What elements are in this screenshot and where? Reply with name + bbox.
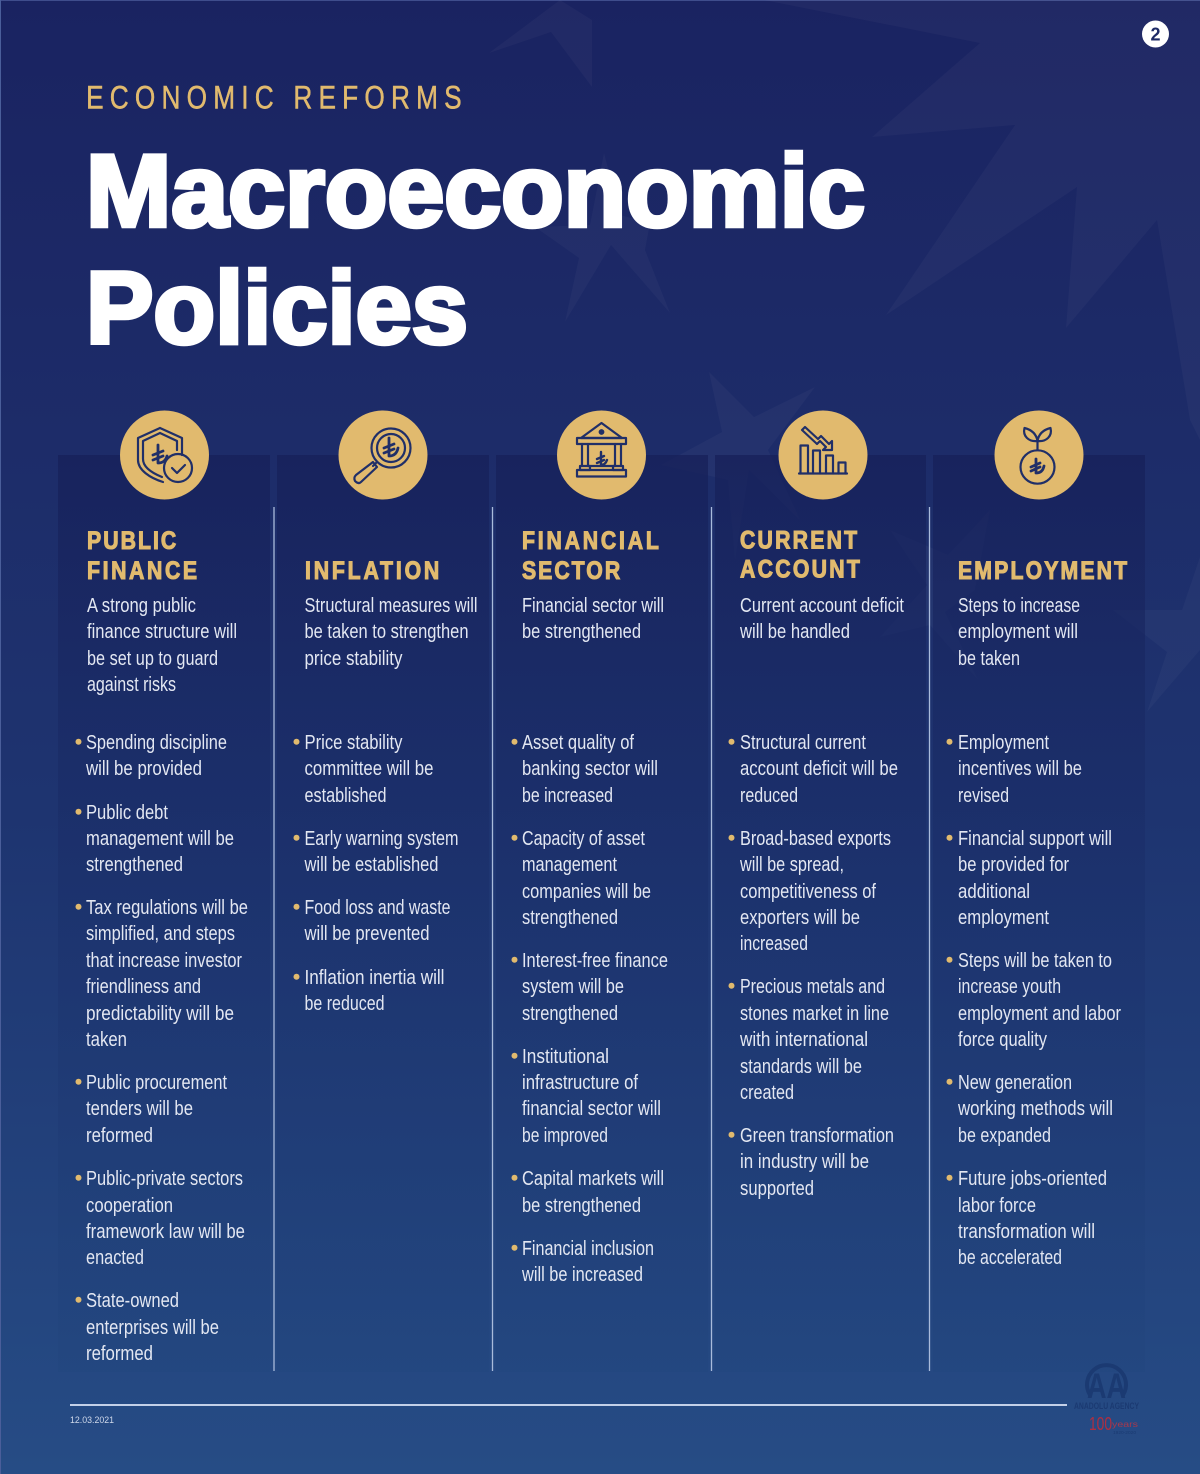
panel: employment	[933, 410, 1145, 1372]
intro text: be set up to guard	[87, 648, 218, 670]
intro text: price stability	[304, 648, 402, 670]
bullet: precious metals: stones market in line	[740, 1003, 889, 1025]
heading	[87, 526, 197, 584]
logo: Anadolu Agency: years	[1112, 1420, 1138, 1429]
bullet: new generation: New generation	[958, 1072, 1072, 1094]
bullet: new generation: working methods will	[957, 1098, 1113, 1120]
bullet: tax regulations: friendliness and	[86, 976, 201, 998]
bullet: capital markets: be strengthened	[522, 1195, 641, 1217]
bullet: youth employment: force quality	[958, 1029, 1047, 1051]
intro text: employment will	[958, 621, 1078, 643]
bullet: future jobs	[946, 1168, 1107, 1269]
footer rule	[70, 1404, 1067, 1406]
bullet: green transformation: Green transformation	[740, 1125, 894, 1147]
bullet: tax regulations: predictability will be	[86, 1003, 234, 1025]
heading: CURRENT	[740, 526, 857, 554]
bullet: green transformation	[728, 1125, 894, 1200]
intro text: be taken to strengthen	[304, 621, 468, 643]
bullet: new generation	[946, 1072, 1113, 1147]
bullet: capital markets	[512, 1168, 664, 1217]
bullet: institutional infrastructure: infrastructure of	[522, 1072, 638, 1094]
bullet: food loss: will be prevented	[304, 923, 430, 945]
bullet: asset quality: be increased	[522, 785, 613, 807]
page number badge	[1142, 20, 1169, 48]
bullet: precious metals	[728, 976, 889, 1104]
bullet: public-private: framework law will be	[86, 1221, 245, 1243]
bullet: broad-based exports: Broad-based exports	[740, 828, 891, 850]
bullet: capacity of asset management: strengthened	[522, 907, 618, 929]
bullet: public-private	[76, 1168, 245, 1269]
bullet: interest-free finance: system will be	[522, 976, 624, 998]
bullet: financial inclusion: Financial inclusion	[522, 1238, 654, 1260]
bullet: public-private: enacted	[86, 1247, 144, 1269]
bullet: spending discipline: Spending discipline	[86, 732, 227, 754]
bullet: broad-based exports: competitiveness of	[740, 881, 876, 903]
icon: falling bar chart	[778, 410, 868, 500]
bullet: structural current account deficit: reduced	[740, 785, 798, 807]
heading: FINANCE	[87, 556, 197, 584]
bullet: state-owned: reformed	[86, 1343, 153, 1365]
bullet: public-private: Public-private sectors	[86, 1168, 243, 1190]
bullet: employment incentives: revised	[958, 785, 1009, 807]
bullet: institutional infrastructure: financial sector will	[522, 1098, 661, 1120]
bullet: capacity of asset management	[512, 828, 651, 929]
bullet: youth employment: Steps will be taken to	[958, 950, 1112, 972]
heading: ACCOUNT	[740, 555, 860, 583]
logo: Anadolu Agency: ANADOLU AGENCY	[1074, 1401, 1139, 1411]
bullet: interest-free finance: Interest-free finance	[522, 950, 668, 972]
heading	[522, 526, 659, 584]
bullet: structural current account deficit: account deficit will be	[740, 758, 898, 780]
intro text: be taken	[958, 648, 1020, 670]
title: Policies	[86, 251, 468, 365]
bullet list	[294, 732, 458, 1015]
bullet list	[512, 732, 668, 1286]
bullet: broad-based exports	[728, 828, 891, 955]
bullet: price stability committee: Price stability	[304, 732, 402, 754]
title: Macroeconomic	[86, 134, 865, 248]
panel: inflation	[277, 410, 489, 1372]
bullet: financial support: Financial support will	[958, 828, 1112, 850]
bullet: financial support: employment	[958, 907, 1049, 929]
bullet: price stability committee: established	[304, 785, 386, 807]
icon: shield with lira and check	[120, 410, 209, 500]
intro text: against risks	[87, 674, 176, 696]
intro text: Steps to increase	[958, 595, 1080, 617]
bullet: inflation inertia: Inflation inertia will	[304, 967, 444, 989]
intro text: Structural measures will	[304, 595, 478, 617]
bullet: financial inclusion	[512, 1238, 654, 1286]
bullet: financial support	[946, 828, 1112, 929]
title	[86, 134, 865, 365]
bullet list	[76, 732, 248, 1365]
bullet: asset quality	[512, 732, 658, 807]
bullet: employment incentives	[946, 732, 1082, 807]
bullet: structural current account deficit	[728, 732, 898, 807]
bullet: broad-based exports: will be spread,	[739, 854, 844, 876]
intro text: be strengthened	[522, 621, 641, 643]
panel: financial sector	[496, 410, 708, 1372]
logo: Anadolu Agency: 1920-2020	[1113, 1430, 1137, 1435]
bullet: future jobs: Future jobs-oriented	[958, 1168, 1107, 1190]
bullet: early warning	[294, 828, 458, 876]
bullet: public-private: cooperation	[86, 1195, 173, 1217]
bullet: interest-free finance	[512, 950, 668, 1025]
bullet: inflation inertia	[294, 967, 444, 1015]
bullet: structural current account deficit: Structural current	[740, 732, 866, 754]
bullet: public debt: management will be	[86, 828, 234, 850]
bullet: state-owned: State-owned	[86, 1290, 179, 1312]
bullet: financial inclusion: will be increased	[521, 1264, 643, 1286]
panel: current account	[715, 410, 926, 1372]
bullet: institutional infrastructure: be improved	[522, 1125, 608, 1147]
bullet: precious metals: created	[740, 1082, 794, 1104]
bullet: capital markets: Capital markets will	[522, 1168, 664, 1190]
bullet: tax regulations	[76, 897, 248, 1051]
bullet: asset quality: Asset quality of	[522, 732, 634, 754]
logo: Anadolu Agency: AA	[1087, 1367, 1126, 1406]
intro text: Financial sector will	[522, 595, 664, 617]
bullet: future jobs: be accelerated	[958, 1247, 1062, 1269]
intro text	[739, 595, 904, 643]
bullet: precious metals: with international	[739, 1029, 868, 1051]
bullet: spending discipline	[76, 732, 227, 780]
intro text: Current account deficit	[740, 595, 904, 617]
bullet: youth employment	[946, 950, 1121, 1051]
bullet: asset quality: banking sector will	[522, 758, 658, 780]
bullet: tax regulations: taken	[86, 1029, 127, 1051]
eyebrow heading: ECONOMIC REFORMS	[86, 81, 462, 116]
bullet: tax regulations: Tax regulations will be	[86, 897, 248, 919]
bullet: green transformation: in industry will be	[740, 1151, 869, 1173]
bullet: public debt: strengthened	[86, 854, 183, 876]
heading	[740, 526, 860, 583]
intro text: A strong public	[87, 595, 196, 617]
page number badge: 2	[1150, 24, 1161, 44]
bullet list	[728, 732, 898, 1200]
bullet: youth employment: employment and labor	[958, 1003, 1121, 1025]
bullet: financial support: be provided for	[958, 854, 1069, 876]
bullet: public debt	[76, 802, 234, 876]
bullet: precious metals: standards will be	[740, 1056, 862, 1078]
heading: INFLATION	[305, 556, 439, 584]
icon: magnifier with lira	[338, 410, 428, 500]
bullet: public debt: Public debt	[86, 802, 168, 824]
bullet: institutional infrastructure	[512, 1046, 661, 1147]
panel: public finance	[58, 410, 270, 1372]
intro text	[522, 595, 664, 643]
bullet: new generation: be expanded	[958, 1125, 1051, 1147]
heading: PUBLIC	[87, 526, 176, 554]
bullet: public procurement: Public procurement	[86, 1072, 227, 1094]
bullet: public procurement: reformed	[86, 1125, 153, 1147]
bullet: green transformation: supported	[740, 1178, 814, 1200]
bullet: future jobs: transformation will	[958, 1221, 1095, 1243]
bullet: early warning: will be established	[304, 854, 438, 876]
bullet: state-owned: enterprises will be	[86, 1317, 219, 1339]
bullet: inflation inertia: be reduced	[304, 993, 384, 1015]
bullet: broad-based exports: increased	[740, 933, 808, 955]
bullet: future jobs: labor force	[958, 1195, 1036, 1217]
logo: Anadolu Agency	[1074, 1365, 1139, 1435]
bullet: spending discipline: will be provided	[85, 758, 202, 780]
bullet: food loss	[294, 897, 450, 945]
bullet: employment incentives: Employment	[958, 732, 1049, 754]
intro text: finance structure will	[87, 621, 237, 643]
bullet: public procurement	[76, 1072, 227, 1147]
bullet: price stability committee: committee will be	[304, 758, 434, 780]
bullet: tax regulations: that increase investor	[86, 950, 242, 972]
bullet: institutional infrastructure: Institutional	[522, 1046, 609, 1068]
bullet list	[946, 732, 1121, 1269]
bullet: tax regulations: simplified, and steps	[86, 923, 235, 945]
bullet: youth employment: increase youth	[958, 976, 1061, 998]
bullet: financial support: additional	[958, 881, 1030, 903]
intro text	[304, 595, 478, 670]
bullet: price stability committee	[294, 732, 434, 807]
heading: FINANCIAL	[522, 526, 659, 554]
bullet: food loss: Food loss and waste	[304, 897, 450, 919]
intro text: will be handled	[739, 621, 850, 643]
icon: bank building with lira	[557, 410, 646, 500]
bullet: capacity of asset management: companies will be	[522, 881, 651, 903]
intro text	[958, 595, 1080, 670]
bullet: precious metals: Precious metals and	[740, 976, 885, 998]
bullet: capacity of asset management: management	[522, 854, 617, 876]
bullet: early warning: Early warning system	[304, 828, 458, 850]
icon: seedling with lira coin	[994, 410, 1084, 500]
bullet: employment incentives: incentives will be	[958, 758, 1082, 780]
intro text	[87, 595, 237, 696]
bullet: state-owned	[76, 1290, 219, 1365]
bullet: interest-free finance: strengthened	[522, 1003, 618, 1025]
logo: Anadolu Agency: 100	[1089, 1414, 1112, 1434]
date: 12.03.2021	[70, 1415, 114, 1426]
bullet: capacity of asset management: Capacity of asset	[522, 828, 645, 850]
heading: SECTOR	[522, 556, 620, 584]
bullet: public procurement: tenders will be	[86, 1098, 193, 1120]
heading: EMPLOYMENT	[958, 556, 1127, 584]
bullet: broad-based exports: exporters will be	[740, 907, 860, 929]
